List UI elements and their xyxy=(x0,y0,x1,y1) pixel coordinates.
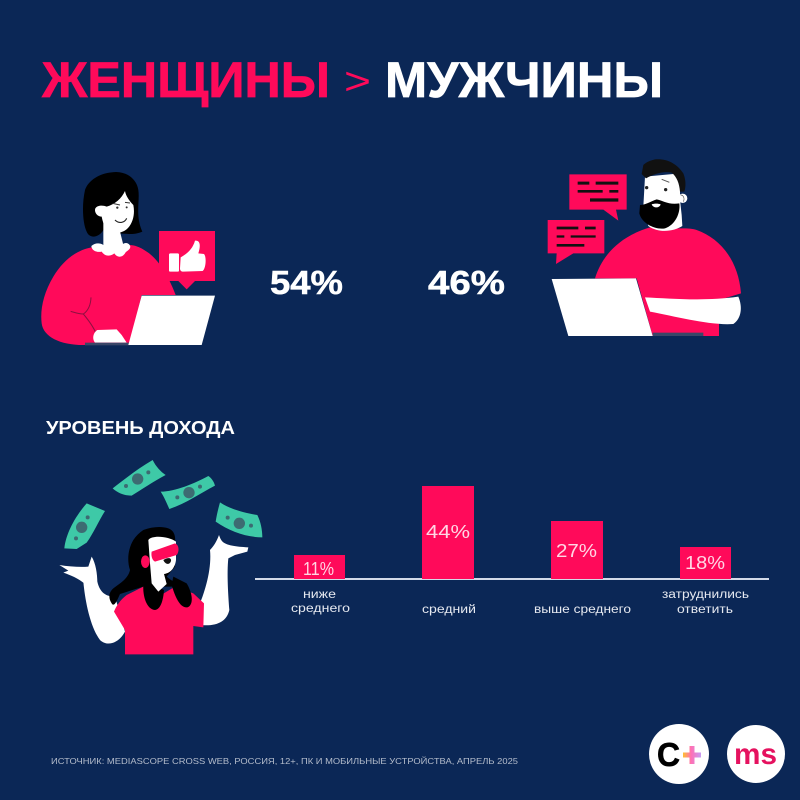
bar: below average xyxy=(291,555,350,615)
bar chart: income xyxy=(255,486,769,616)
bar: hard to answer xyxy=(662,547,749,616)
title: МУЖЧИНЫ xyxy=(385,52,663,108)
bar: below average: среднего xyxy=(291,603,350,615)
icon: woman in VR juggling money xyxy=(59,460,262,654)
title: > xyxy=(344,61,371,103)
logo: ms xyxy=(727,725,785,783)
bar: above average xyxy=(534,521,631,616)
woman's head xyxy=(83,172,142,245)
bar: below average: ниже xyxy=(303,589,336,601)
icon: speech bubble bottom xyxy=(548,220,604,264)
logo: ms: ms xyxy=(734,738,777,771)
bar: above average: 27% xyxy=(556,541,597,561)
icon: man with laptop xyxy=(548,159,741,336)
title: ЖЕНЩИНЫ xyxy=(41,52,330,108)
bar: below average: 11% xyxy=(303,559,334,579)
text: 46%: 46% xyxy=(428,264,505,301)
logo: C+: C xyxy=(657,736,680,773)
arms xyxy=(59,535,248,644)
icon: banknotes xyxy=(64,460,262,549)
bar: average: средний xyxy=(422,604,476,616)
man's head xyxy=(639,159,687,231)
source note: ИСТОЧНИК: MEDIASCOPE CROSS WEB, РОССИЯ, 12+, ПК И МОБИЛЬНЫЕ УСТРОЙСТВА, АПРЕЛЬ 2025 xyxy=(51,755,518,766)
text: 54%: 54% xyxy=(270,264,343,301)
bar: hard to answer: затруднились xyxy=(662,589,749,601)
icon: woman with laptop xyxy=(41,172,215,345)
bar: hard to answer: ответить xyxy=(677,604,733,616)
logo: C+ xyxy=(649,724,709,784)
bar: average: 44% xyxy=(426,522,470,542)
title xyxy=(41,52,663,108)
figure: hair, shirt and face xyxy=(109,527,204,654)
bar: above average: выше среднего xyxy=(534,604,631,616)
icon: speech bubble top xyxy=(569,174,627,221)
icon: like bubble xyxy=(159,231,215,289)
bar: hard to answer: 18% xyxy=(685,553,725,573)
bar: average xyxy=(422,486,476,616)
heading: income level: УРОВЕНЬ ДОХОДА xyxy=(46,418,235,438)
